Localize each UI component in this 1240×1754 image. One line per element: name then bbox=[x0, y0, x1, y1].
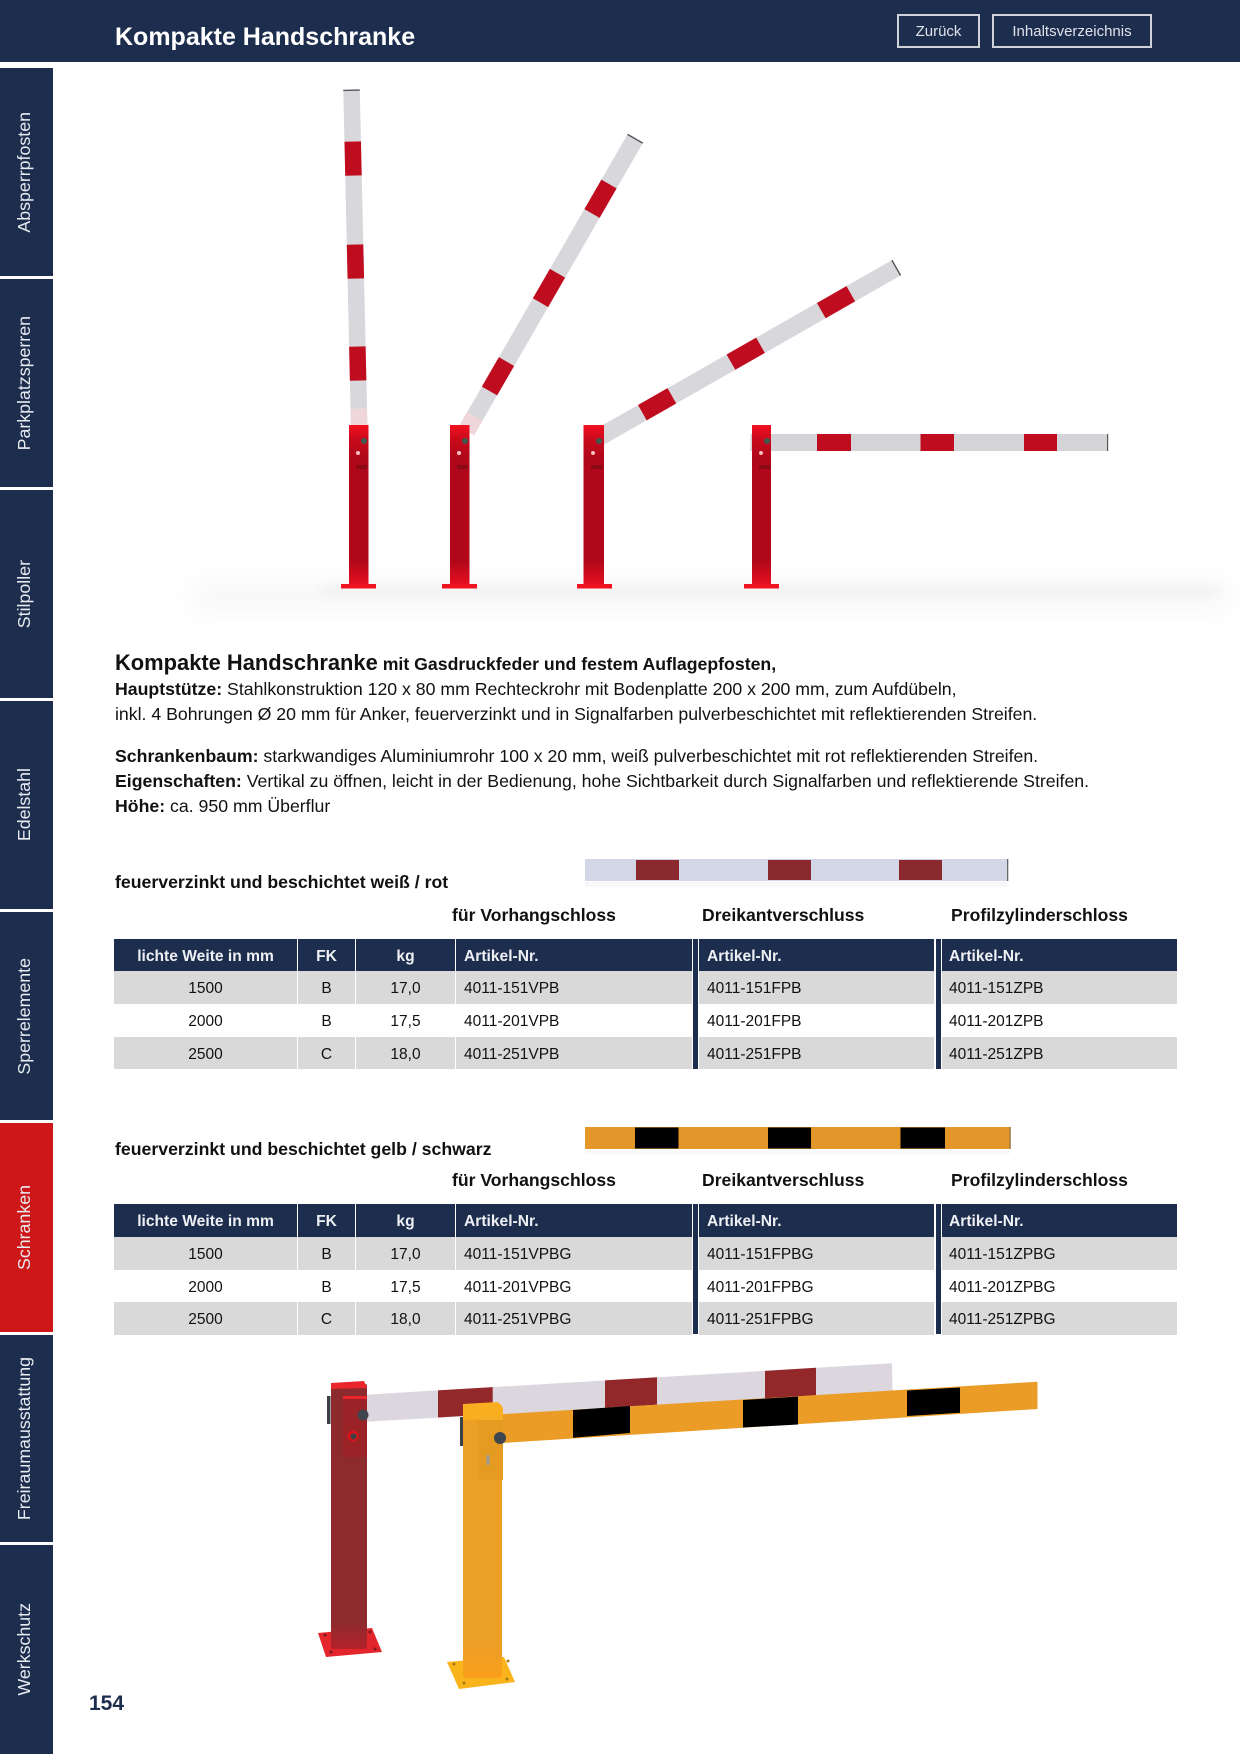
barrier: vertical position bbox=[341, 89, 376, 588]
line: Höhe: Höhe: ca. 950 mm Überflur bbox=[115, 796, 330, 816]
tab: Edelstahl bbox=[0, 701, 53, 909]
title: Kompakte Handschranke bbox=[115, 23, 415, 51]
row 1500 bbox=[114, 971, 1177, 1004]
section heading: gelb / schwarz: feuerverzinkt und beschichtet gelb / schwarz bbox=[115, 1139, 491, 1159]
row 2500: 4011-251VPBG bbox=[464, 1311, 571, 1328]
sidebar navigation bbox=[0, 68, 53, 1754]
button: Inhaltsverzeichnis: Inhaltsverzeichnis bbox=[1012, 23, 1132, 40]
product illustration: red and yellow barriers bbox=[318, 1363, 1038, 1689]
row 2500: 4011-251VPB bbox=[464, 1046, 559, 1062]
barrier: 30 degree position bbox=[577, 260, 901, 588]
barrier: horizontal position bbox=[744, 425, 1108, 588]
button: Zurück: Zurück bbox=[916, 23, 961, 40]
line: Schrankenbaum: Schrankenbaum: starkwandiges Aluminiumrohr 100 x 20 mm, weiß pulverbeschichtet mit rot reflektierenden Streifen. bbox=[115, 746, 1038, 766]
row 2000: 17,5 bbox=[390, 1278, 421, 1296]
tab: Schranken (active): Schranken bbox=[14, 1185, 34, 1270]
row 2500: 4011-251FPB bbox=[707, 1046, 802, 1062]
row 2000: 4011-201ZPB bbox=[949, 1013, 1044, 1030]
row 1500: 17,0 bbox=[390, 980, 421, 997]
ground shadow bbox=[190, 582, 1230, 612]
table header: kg bbox=[396, 948, 415, 965]
line: Eigenschaften: Eigenschaften: Vertikal zu öffnen, leicht in der Bedienung, hohe Sichtbarkeit durch Signalfarben und reflektierende Streifen. bbox=[115, 771, 1089, 791]
row 2500: 2500 bbox=[188, 1311, 223, 1328]
line: Hauptstütze: Hauptstütze: Stahlkonstruktion 120 x 80 mm Rechteckrohr mit Bodenplatte 200 x 200 mm, zum Aufdübeln, bbox=[115, 679, 957, 699]
table header: Artikel-Nr. bbox=[464, 948, 539, 965]
product illustration: four barrier positions bbox=[320, 89, 1218, 598]
section heading: weiß / rot: feuerverzinkt und beschichtet weiß / rot bbox=[115, 872, 448, 892]
row 2500: 18,0 bbox=[390, 1311, 421, 1328]
table header: Artikel-Nr. bbox=[464, 1213, 539, 1230]
column group labels 1 bbox=[452, 905, 1128, 925]
column group labels 2 bbox=[452, 1170, 1128, 1190]
row 2000: 2000 bbox=[188, 1278, 223, 1296]
row 1500: 4011-151ZPB bbox=[949, 980, 1044, 997]
line: Bohrungen: inkl. 4 Bohrungen Ø 20 mm für Anker, feuerverzinkt und in Signalfarben pulverbeschichtet mit reflektierenden Streifen. bbox=[115, 704, 1037, 724]
yellow and black barrier bbox=[447, 1382, 1038, 1689]
button: Inhaltsverzeichnis bbox=[992, 14, 1152, 48]
table: gelb / schwarz bbox=[114, 1204, 1177, 1335]
row 1500: 4011-151ZPBG bbox=[949, 1246, 1056, 1263]
label: Profilzylinderschloss: Profilzylinderschloss bbox=[951, 905, 1128, 925]
tab: Freiraumausstattung: Freiraumausstattung bbox=[14, 1357, 34, 1520]
row 1500: 4011-151FPB bbox=[707, 980, 802, 997]
row 2500: C bbox=[321, 1046, 332, 1062]
table: weiß / rot bbox=[114, 939, 1177, 1069]
row 1500: 1500 bbox=[188, 1246, 223, 1263]
table header: lichte Weite in mm bbox=[137, 948, 274, 965]
row 2000 bbox=[188, 1013, 1044, 1030]
row 2500: 4011-251FPBG bbox=[707, 1311, 814, 1328]
header bar bbox=[0, 0, 1240, 62]
label: für Vorhangschloss: für Vorhangschloss bbox=[452, 905, 616, 925]
tab: Werkschutz: Werkschutz bbox=[14, 1603, 34, 1696]
tab: Absperrpfosten: Absperrpfosten bbox=[14, 112, 34, 232]
row 1500: 1500 bbox=[188, 980, 223, 997]
row 2000: 4011-201FPB bbox=[707, 1013, 802, 1030]
tab: Sperrelemente bbox=[0, 912, 53, 1120]
row 2500 bbox=[114, 1302, 1177, 1335]
barrier: 60 degree position bbox=[442, 134, 643, 588]
swatch: gelb / schwarz beam bbox=[585, 1127, 1011, 1149]
tab: Freiraumausstattung bbox=[0, 1335, 53, 1542]
row 2000: 4011-201FPBG bbox=[707, 1278, 814, 1296]
table header: Artikel-Nr. bbox=[707, 1213, 782, 1230]
table header: FK bbox=[316, 1213, 337, 1230]
row 1500: 4011-151FPBG bbox=[707, 1246, 814, 1263]
table header: kg bbox=[396, 1213, 415, 1230]
tab: Werkschutz bbox=[0, 1545, 53, 1754]
row 2000: 4011-201ZPBG bbox=[949, 1278, 1056, 1296]
table header bbox=[114, 1204, 1177, 1237]
row 1500 bbox=[114, 1237, 1177, 1270]
tab: Absperrpfosten bbox=[0, 68, 53, 276]
description text bbox=[115, 650, 1089, 816]
table header: Artikel-Nr. bbox=[707, 948, 782, 965]
swatch: weiß / rot beam bbox=[585, 859, 1008, 881]
row 2000: B bbox=[321, 1278, 332, 1296]
row 2500 bbox=[114, 1037, 1177, 1069]
red and white barrier bbox=[318, 1363, 892, 1657]
tab: Sperrelemente: Sperrelemente bbox=[14, 958, 34, 1074]
row 2000 bbox=[188, 1278, 1056, 1296]
row 2000: 17,5 bbox=[390, 1013, 421, 1030]
label: Dreikantverschluss: Dreikantverschluss bbox=[702, 905, 864, 925]
page number: 154 bbox=[89, 1692, 124, 1715]
label: für Vorhangschloss: für Vorhangschloss bbox=[452, 1170, 616, 1190]
table header bbox=[114, 939, 1177, 971]
row 1500: B bbox=[321, 980, 332, 997]
label: Dreikantverschluss: Dreikantverschluss bbox=[702, 1170, 864, 1190]
row 2000: 4011-201VPBG bbox=[464, 1278, 571, 1296]
row 2000: B bbox=[321, 1013, 332, 1030]
table header: Artikel-Nr. bbox=[949, 1213, 1024, 1230]
row 2000: 4011-201VPB bbox=[464, 1013, 559, 1030]
row 1500: 4011-151VPBG bbox=[464, 1246, 571, 1263]
button: Zurück bbox=[897, 14, 980, 48]
row 1500: 4011-151VPB bbox=[464, 980, 559, 997]
table header: FK bbox=[316, 948, 337, 965]
row 2500: 18,0 bbox=[390, 1046, 421, 1062]
table header: Artikel-Nr. bbox=[949, 948, 1024, 965]
row 2500: C bbox=[321, 1311, 332, 1328]
tab: Stilpoller bbox=[0, 490, 53, 698]
tab: Schranken (active) bbox=[0, 1123, 53, 1332]
tab: Stilpoller: Stilpoller bbox=[14, 560, 34, 628]
row 2500: 4011-251ZPBG bbox=[949, 1311, 1056, 1328]
row 2500: 4011-251ZPB bbox=[949, 1046, 1044, 1062]
tab: Parkplatzsperren: Parkplatzsperren bbox=[14, 316, 34, 450]
description heading: Kompakte Handschranke mit Gasdruckfeder und festem Auflagepfosten, bbox=[115, 650, 776, 675]
row 1500: B bbox=[321, 1246, 332, 1263]
row 2500: 2500 bbox=[188, 1046, 223, 1062]
row 2000: 2000 bbox=[188, 1013, 223, 1030]
label: Profilzylinderschloss: Profilzylinderschloss bbox=[951, 1170, 1128, 1190]
tab: Edelstahl: Edelstahl bbox=[14, 768, 34, 842]
tab: Parkplatzsperren bbox=[0, 279, 53, 487]
row 1500: 17,0 bbox=[390, 1246, 421, 1263]
table header: lichte Weite in mm bbox=[137, 1213, 274, 1230]
